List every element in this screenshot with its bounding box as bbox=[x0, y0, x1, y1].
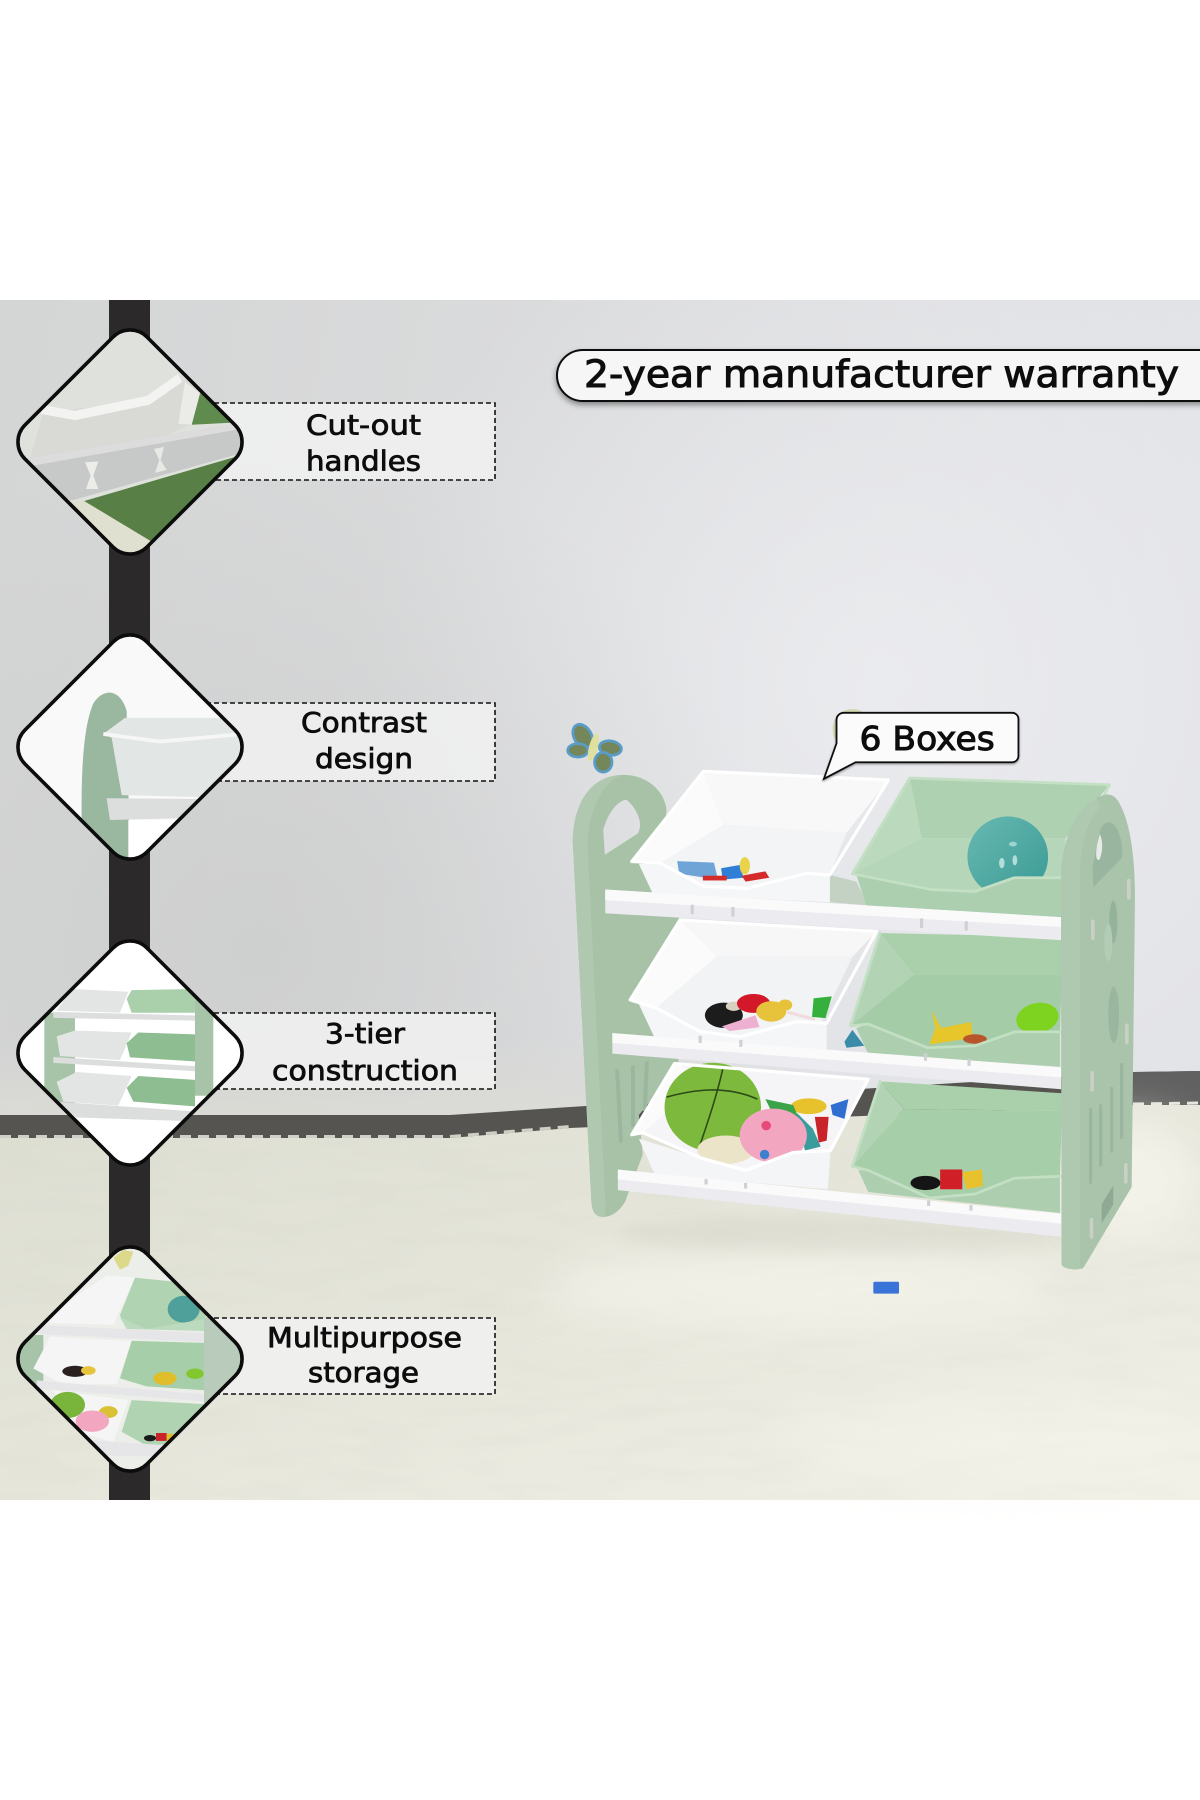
vertical black band bbox=[109, 300, 150, 1500]
white bin, middle left bbox=[630, 920, 876, 1050]
feature 4: multipurpose storage bbox=[0, 1237, 495, 1481]
product: toy storage shelf bbox=[568, 709, 1109, 1294]
green bin, bottom right bbox=[852, 1081, 1062, 1213]
warranty pill: 2-year manufacturer warranty bbox=[584, 353, 1179, 396]
label: multipurpose storage: storage bbox=[308, 1356, 419, 1389]
background photo: wall, skirting and carpet bbox=[0, 300, 1200, 1500]
feature 2: contrast design bbox=[16, 633, 496, 861]
label: contrast design: Contrast bbox=[301, 706, 427, 739]
callout: 6 Boxes: 6 Boxes bbox=[859, 719, 995, 758]
label: cut-out handles bbox=[190, 403, 495, 480]
white shelf rail, top bbox=[605, 890, 1062, 940]
label: 3-tier construction bbox=[190, 1013, 495, 1089]
pink plush toy bbox=[740, 1109, 807, 1162]
diamond photo: filled shelf bbox=[16, 1245, 244, 1473]
callout: 6 Boxes bbox=[824, 713, 1018, 779]
right side panel of shelf bbox=[1061, 795, 1135, 1269]
infographic canvas bbox=[0, 300, 1200, 1500]
green bin, middle right bbox=[850, 933, 1062, 1067]
label: cut-out handles: handles bbox=[306, 445, 421, 478]
icon: green butterfly sticker bbox=[568, 721, 622, 772]
white shelf rail, bottom bbox=[618, 1170, 1061, 1237]
label: 3-tier construction: 3-tier bbox=[325, 1017, 406, 1050]
diamond photo: three-tier shelf bbox=[16, 939, 244, 1167]
label: contrast design bbox=[190, 703, 495, 781]
white bin, bottom left bbox=[632, 1063, 868, 1189]
white bin, top left bbox=[632, 771, 888, 902]
label: contrast design: design bbox=[315, 742, 413, 775]
label: 3-tier construction: construction bbox=[272, 1054, 458, 1087]
floor shadow under shelf bbox=[620, 1217, 1100, 1253]
diamond photo: white bin against green frame bbox=[16, 633, 244, 861]
label: multipurpose storage bbox=[190, 1318, 495, 1394]
label: cut-out handles: Cut-out bbox=[306, 409, 421, 442]
faint yellow butterfly sticker behind callout bbox=[833, 709, 872, 750]
loose blue block on carpet bbox=[873, 1282, 899, 1294]
feature 3: 3-tier construction bbox=[0, 931, 495, 1175]
green basketball bbox=[665, 1063, 761, 1151]
small toy between bins bbox=[844, 1030, 864, 1048]
label: multipurpose storage: Multipurpose bbox=[267, 1321, 462, 1354]
diamond photo: bin handle close-up bbox=[16, 328, 244, 556]
green bin, top right bbox=[852, 778, 1109, 917]
teal ball bbox=[967, 816, 1048, 897]
left side panel bbox=[573, 775, 680, 1217]
feature 1: cut-out handles bbox=[0, 320, 495, 564]
white shelf rail, middle bbox=[612, 1033, 1061, 1089]
gap shading between bins bbox=[830, 875, 868, 905]
